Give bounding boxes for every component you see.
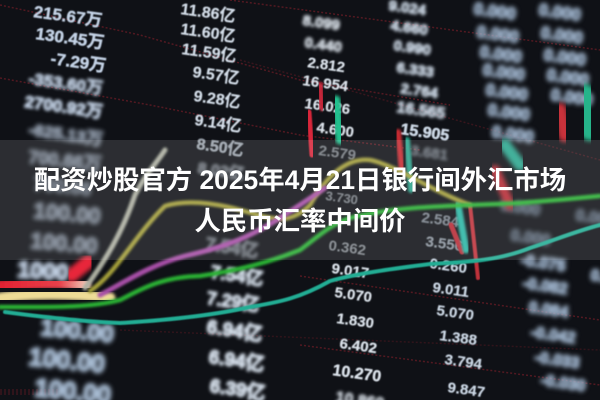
column: fourth figures: 6.333 bbox=[395, 59, 435, 81]
column: values in yi: 7.54亿 bbox=[209, 262, 265, 289]
column: values in yi: 11.86亿 bbox=[179, 0, 237, 26]
column: fifth and sixth blurred figures: 0.000 bbox=[499, 197, 542, 220]
column: values in wan: -7.29万 bbox=[49, 49, 107, 76]
column: fourth figures: 2.584 bbox=[420, 209, 461, 231]
column: fourth figures: 3.681 bbox=[409, 142, 449, 164]
column: fifth and sixth blurred figures: -0.075 bbox=[519, 252, 567, 275]
column: fourth figures: 1.388 bbox=[438, 327, 478, 349]
column: values in yi: 8.02亿 bbox=[196, 159, 246, 184]
column: values in yi bbox=[179, 0, 267, 400]
column: fifth and sixth blurred figures: -0.082 bbox=[521, 275, 569, 298]
column: third figures: 4.600 bbox=[315, 119, 355, 141]
column: values in wan: 700.66万 bbox=[28, 147, 102, 175]
column: values in yi: 9.28亿 bbox=[192, 87, 242, 112]
column: fifth and sixth blurred figures: -0.030 bbox=[539, 372, 587, 395]
moving average lines bbox=[0, 150, 600, 323]
column: third figures: 5.070 bbox=[333, 284, 373, 306]
column: values in yi: 6.94亿 bbox=[207, 346, 266, 376]
column: fifth and sixth blurred figures: 0.000 bbox=[542, 45, 587, 70]
column: third figures: 16.026 bbox=[303, 95, 351, 118]
column: fourth figures: 4.660 bbox=[389, 17, 429, 39]
column: third figures: 10.270 bbox=[331, 362, 382, 386]
column: fifth and sixth blurred figures: 0.084 bbox=[527, 299, 570, 322]
column: values in wan: 130.45万 bbox=[34, 24, 105, 53]
column: fourth figures: 0.990 bbox=[392, 37, 432, 59]
column: fifth and sixth blurred figures: 0.000 bbox=[475, 22, 520, 47]
title bbox=[34, 165, 566, 236]
column: fourth figures: 9.011 bbox=[431, 279, 470, 301]
column: fourth figures: 15.905 bbox=[399, 121, 450, 145]
column: third figures: 8.099 bbox=[301, 12, 341, 34]
column: fourth figures: 0.260 bbox=[428, 255, 468, 277]
column: third figures: 6.402 bbox=[338, 335, 378, 357]
title: 配资炒股官方 2025年4月21日银行间外汇市场 bbox=[34, 165, 566, 195]
column: fourth figures: 16.565 bbox=[395, 99, 446, 123]
candlesticks bbox=[140, 85, 590, 290]
column: fifth and sixth blurred figures bbox=[472, 0, 600, 395]
column: values in wan: 100.00 bbox=[39, 314, 115, 349]
translucent title band bbox=[0, 140, 600, 260]
column: fifth and sixth blurred figures: 0.000 bbox=[484, 80, 529, 105]
column: values in wan: 100.00 bbox=[33, 198, 102, 229]
column: values in wan: -625.13万 bbox=[27, 120, 104, 149]
column: third figures bbox=[301, 12, 385, 400]
column: third figures: 2.579 bbox=[317, 142, 357, 164]
column: values in wan: 1000 bbox=[17, 256, 70, 286]
column: values in wan bbox=[17, 2, 115, 400]
title: 人民币汇率中间价 bbox=[194, 206, 406, 236]
column: values in yi: 8.50亿 bbox=[195, 135, 245, 160]
column: values in yi: 7.54亿 bbox=[204, 234, 260, 261]
column: fourth figures bbox=[387, 0, 486, 400]
column: third figures: 0.440 bbox=[303, 34, 343, 56]
column: values in yi: 11.60亿 bbox=[179, 20, 237, 46]
column: fifth and sixth blurred figures: -0.042 bbox=[529, 324, 577, 347]
column: third figures: 16.954 bbox=[301, 72, 350, 95]
column: values in wan: 100.00 bbox=[27, 343, 106, 379]
column: fifth and sixth blurred figures: 0.000 bbox=[545, 65, 590, 90]
column: fifth and sixth blurred figures: 0.000 bbox=[537, 0, 582, 25]
column: fifth and sixth blurred figures: 0.000 bbox=[478, 42, 523, 67]
column: fourth figures: 5.070 bbox=[435, 302, 475, 324]
column: values in wan: 100.00 bbox=[30, 228, 99, 259]
column: values in yi: 9.57亿 bbox=[191, 63, 241, 88]
column: fifth and sixth blurred figures: 0.000 bbox=[539, 23, 584, 48]
column: values in wan: 215.67万 bbox=[32, 2, 103, 31]
column: fifth and sixth blurred figures: 0.000 bbox=[549, 85, 594, 110]
column: fifth and sixth blurred figures: -0.033 bbox=[533, 349, 581, 372]
column: third figures: 9.017 bbox=[330, 260, 370, 282]
column: fifth and sixth blurred figures: 0.000 bbox=[486, 100, 531, 125]
column: third figures: 1.830 bbox=[335, 310, 375, 332]
column: values in yi: 11.59亿 bbox=[180, 40, 238, 66]
column: third figures: 0.362 bbox=[327, 237, 367, 259]
column: values in yi: 9.14亿 bbox=[193, 111, 243, 136]
column: third figures: 2.812 bbox=[306, 54, 346, 76]
column: fifth and sixth blurred figures: 0.000 bbox=[481, 60, 526, 85]
column: fifth and sixth blurred figures: 0.000 bbox=[490, 122, 535, 147]
column: fourth figures: 3.794 bbox=[443, 351, 484, 373]
column: fourth figures: 2.764 bbox=[399, 80, 440, 102]
column: values in wan: 2700.92万 bbox=[23, 92, 104, 122]
column: values in yi: 7.29亿 bbox=[205, 288, 261, 315]
column: fifth and sixth blurred figures: 0.000 bbox=[509, 227, 552, 250]
column: values in wan: -353.60万 bbox=[27, 69, 104, 98]
column: third figures: 3.730 bbox=[325, 188, 359, 208]
column: values in wan: 700.66 bbox=[32, 174, 92, 201]
column: values in yi: 6.94亿 bbox=[205, 316, 264, 346]
column: fourth figures: 3.556 bbox=[424, 233, 464, 255]
